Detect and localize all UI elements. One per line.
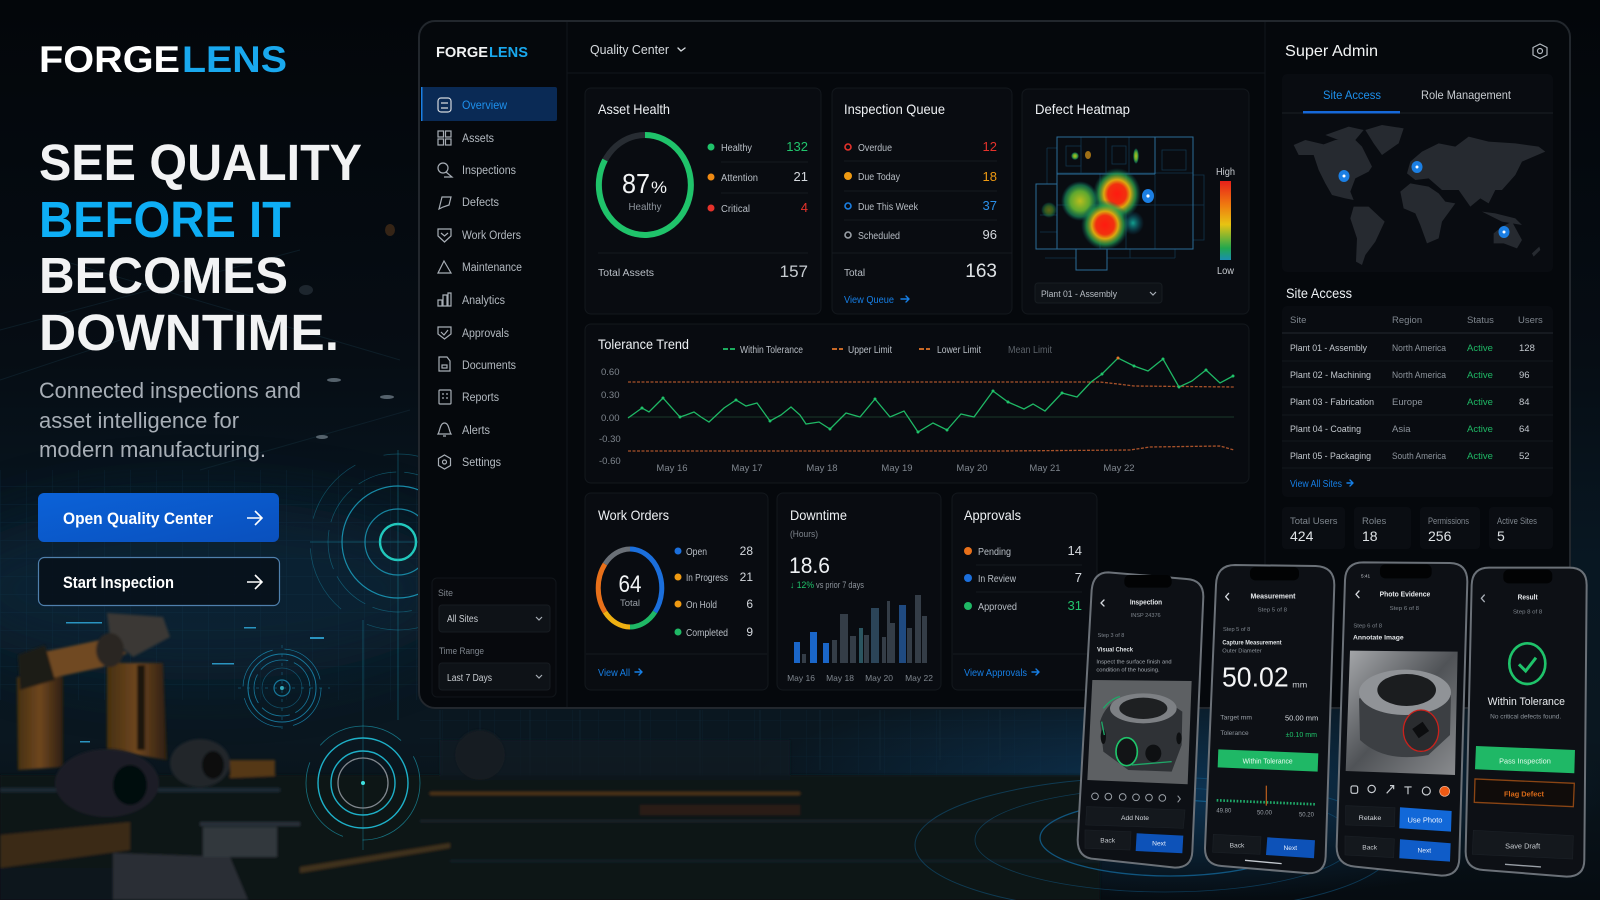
row: Pending: 14	[1068, 543, 1082, 558]
filter panel	[432, 578, 556, 697]
stat: Active Sites: 5	[1497, 528, 1505, 544]
phone 4: Result: Step 8 of 8	[1513, 609, 1542, 615]
floor rings	[915, 777, 1395, 900]
row: In Review: 7	[1075, 570, 1082, 585]
nav: Settings: Settings	[462, 457, 501, 469]
dashboard frame	[419, 21, 1570, 708]
background: robot arm	[17, 613, 170, 770]
stat: Roles: Roles	[1362, 516, 1387, 527]
row: Plant 05: South America	[1392, 451, 1447, 462]
stat: Total Users	[1282, 507, 1345, 549]
donut: 87% healthy: Healthy	[628, 201, 662, 213]
status button: Within Tolerance	[1218, 749, 1318, 772]
donut: 64 total: 64	[618, 571, 642, 598]
x axis: May 21	[1029, 463, 1061, 474]
donut: 64 total	[598, 549, 662, 627]
target and tolerance: Tolerance	[1220, 730, 1249, 737]
x axis: May 18	[806, 463, 838, 474]
legend: asset status: 21	[794, 169, 808, 184]
row: Due Today	[844, 169, 997, 184]
sidebar logo	[436, 45, 528, 61]
row: Approved	[964, 598, 1082, 613]
row: Pending: Pending	[978, 547, 1011, 558]
x axis: May 19	[881, 463, 913, 474]
x axis: May 16	[656, 463, 688, 474]
panel: Downtime: (Hours)	[790, 529, 818, 540]
measurement gauge	[1216, 786, 1316, 819]
button: Flag Defect: Flag Defect	[1504, 790, 1545, 799]
sidebar logo: FORGE	[436, 45, 488, 61]
y axis: 0.30	[601, 390, 620, 401]
link: View Queue: View Queue	[844, 294, 894, 306]
row: Due This Week: Due This Week	[858, 202, 919, 213]
total: 163	[965, 261, 997, 282]
row: Approved: 31	[1068, 598, 1082, 613]
row: Pending	[964, 543, 1082, 558]
panel: Work Orders	[585, 493, 768, 690]
nav: Analytics	[438, 293, 505, 307]
bar labels: May 22	[905, 673, 933, 683]
y axis: -0.60	[599, 456, 621, 467]
phone 3: Photo Evidence: Step 6 of 8	[1353, 624, 1382, 630]
panel: Downtime	[777, 493, 941, 690]
button: Back: Back	[1362, 845, 1378, 852]
HUD target: small ring	[238, 645, 330, 730]
phone 4: Result	[1466, 568, 1587, 877]
filter panel: Time Range	[439, 646, 484, 657]
nav: Work Orders	[438, 229, 521, 242]
nav: Documents: Documents	[462, 360, 516, 372]
button: Add Note	[1086, 807, 1185, 828]
nav: Inspections: Inspections	[462, 165, 516, 177]
row: Overdue: Overdue	[858, 143, 892, 154]
phone 1: Inspection: INSP 24376	[1131, 613, 1161, 619]
y axis	[599, 367, 621, 467]
button: Next	[1136, 833, 1183, 853]
phone 1: Inspection	[1078, 572, 1203, 868]
filter panel: Site	[438, 588, 453, 599]
line chart	[628, 356, 1234, 451]
logo	[39, 39, 287, 80]
stat: Total Users: 424	[1290, 528, 1314, 544]
stat: Permissions	[1420, 507, 1480, 549]
nav: Documents	[439, 357, 516, 372]
status button: Within Tolerance: Within Tolerance	[1243, 758, 1293, 765]
filter panel: All Sites	[447, 614, 478, 625]
row: Plant 04: 64	[1519, 424, 1530, 435]
heat scale: High	[1216, 167, 1235, 178]
stat: Permissions: 256	[1428, 528, 1452, 544]
row: Plant 04	[1290, 424, 1530, 435]
phone 1: Inspection: Inspect the surface finish and	[1096, 659, 1172, 665]
button: Use Photo	[1399, 807, 1452, 832]
donut: 87% healthy: %	[651, 178, 667, 197]
subheading: modern manufacturing.	[39, 437, 266, 462]
row: In Review: In Review	[978, 574, 1017, 585]
button: Retake	[1346, 806, 1395, 827]
row: Plant 02: North America	[1392, 370, 1447, 381]
row: Plant 03: Active	[1467, 397, 1493, 408]
nav: Work Orders: Work Orders	[462, 230, 521, 242]
right panel: Super Admin: Super Admin	[1285, 43, 1378, 60]
target and tolerance: ±0.10 mm	[1286, 732, 1317, 739]
heat blobs	[1041, 148, 1144, 250]
nav: Inspections	[438, 163, 516, 177]
link: View All: View All	[598, 667, 630, 679]
row: Due This Week	[845, 198, 997, 213]
chart legend: Lower Limit	[937, 345, 981, 356]
measurement value: mm	[1292, 680, 1307, 690]
headline: BECOMES	[39, 247, 288, 304]
row: Plant 05: Active	[1467, 451, 1493, 462]
legend: asset status: 132	[786, 139, 808, 154]
phone 3: Photo Evidence	[1337, 562, 1467, 876]
row: Plant 04: Plant 04 - Coating	[1290, 424, 1361, 435]
donut: 87% healthy: 87	[622, 168, 650, 199]
row: Scheduled: 96	[983, 227, 997, 242]
y axis: 0.60	[601, 367, 620, 378]
button: Flag Defect	[1474, 779, 1574, 807]
row: Plant 01: 128	[1519, 343, 1535, 354]
phone 1: Inspection: Step 3 of 8	[1098, 633, 1124, 639]
row: Plant 05: 52	[1519, 451, 1530, 462]
chart legend	[723, 345, 1052, 356]
nav: Maintenance: Maintenance	[462, 262, 522, 274]
panel: Downtime: 18.6	[789, 553, 830, 578]
bar labels: May 20	[865, 673, 893, 683]
nav: Analytics: Analytics	[462, 295, 505, 307]
button: Next	[1266, 837, 1315, 858]
downtime delta	[790, 580, 864, 590]
bar chart	[794, 595, 927, 663]
headline	[39, 134, 362, 361]
chart legend: Upper Limit	[848, 345, 892, 356]
row: Plant 04: Asia	[1392, 424, 1411, 435]
nav active: Overview: Overview	[462, 100, 508, 112]
chart legend: Mean Limit	[1008, 345, 1052, 356]
row: Plant 02	[1290, 370, 1530, 381]
row: Plant 03	[1290, 397, 1530, 408]
stat: Roles: 18	[1362, 528, 1378, 544]
floor plan	[1036, 137, 1204, 270]
row: Plant 03: 84	[1519, 397, 1530, 408]
panel: Asset Health	[585, 88, 821, 314]
x axis	[656, 463, 1135, 474]
stat: Permissions: Permissions	[1428, 516, 1469, 527]
phone 4: Result: Within Tolerance	[1488, 696, 1565, 708]
location pin	[1142, 189, 1154, 203]
phone 2: Measurement	[1205, 565, 1334, 873]
phone 3: Photo Evidence: Photo Evidence	[1380, 589, 1430, 598]
target and tolerance: 50.00 mm	[1285, 716, 1318, 723]
downtime delta: ↓ 12%	[790, 580, 814, 590]
row: Plant 01: Plant 01 - Assembly	[1290, 343, 1367, 354]
panel: Downtime: Downtime	[790, 507, 847, 523]
phone 2: Measurement: Capture Measurement	[1222, 640, 1282, 646]
row: Plant 04: Active	[1467, 424, 1493, 435]
work order legend	[674, 544, 753, 639]
work order legend: On Hold	[686, 600, 717, 611]
plant dropdown: Plant 01 - Assembly	[1041, 289, 1117, 300]
legend: asset status	[598, 139, 808, 253]
button: Retake: Retake	[1359, 815, 1382, 822]
donut: 64 total: Total	[620, 598, 640, 609]
map pins	[1338, 161, 1510, 238]
phone 3: Photo Evidence: Step 6 of 8	[1390, 606, 1419, 612]
row: Plant 05: Plant 05 - Packaging	[1290, 451, 1371, 462]
legend: asset status: Attention	[721, 173, 758, 184]
total assets	[598, 262, 808, 281]
legend: asset status: Healthy	[721, 143, 752, 154]
measurement gauge: 50.20	[1299, 813, 1315, 819]
button: Pass Inspection: Pass Inspection	[1499, 756, 1551, 765]
sidebar logo: LENS	[489, 45, 528, 61]
heat scale: Low	[1217, 266, 1235, 277]
nav: Maintenance	[438, 261, 522, 274]
button: Start Inspection	[38, 558, 280, 606]
phone 2: Measurement: Step 5 of 8	[1258, 608, 1287, 614]
row: Overdue	[845, 139, 997, 154]
phone 2: Measurement: Measurement	[1250, 591, 1296, 600]
icon: pass check	[1509, 643, 1545, 684]
phone 2: Measurement: Outer Diameter	[1222, 648, 1262, 654]
bar labels	[787, 673, 933, 683]
annotated photo: flange part	[1346, 651, 1458, 775]
HUD target: upper ring	[310, 450, 486, 850]
row: In Review	[964, 570, 1082, 585]
row: Scheduled: Scheduled	[858, 231, 900, 242]
measurement gauge: 50.00	[1257, 810, 1273, 816]
button: Next	[1399, 839, 1451, 862]
button: Back	[1213, 834, 1261, 854]
stat: Total Users: Total Users	[1290, 516, 1338, 527]
table: site access	[1282, 306, 1553, 497]
frame dividers	[567, 22, 1265, 707]
panel: Approvals: Approvals	[964, 507, 1021, 523]
donut: 87% healthy	[599, 135, 691, 235]
nav: Assets	[438, 131, 494, 145]
heading: Site Access: Site Access	[1286, 285, 1352, 301]
table: site access: Region	[1392, 315, 1422, 326]
world map	[1294, 125, 1545, 265]
nav: Alerts	[438, 423, 490, 437]
row: Approved: Approved	[978, 602, 1017, 613]
row: Plant 02: Active	[1467, 370, 1493, 381]
button: Open Quality Center	[38, 493, 279, 542]
phone 3: Photo Evidence: Annotate Image	[1353, 634, 1404, 641]
icon: settings gear	[1533, 44, 1547, 58]
top bar: Quality Center: Quality Center	[590, 43, 669, 57]
link: View Approvals: View Approvals	[964, 667, 1027, 679]
row: Plant 03: Europe	[1392, 397, 1423, 408]
work order legend: In Progress	[686, 573, 728, 584]
nav: Defects	[439, 197, 499, 209]
annotation tools	[1092, 793, 1180, 802]
row: Plant 03: Plant 03 - Fabrication	[1290, 397, 1374, 408]
nav: Approvals: Approvals	[462, 328, 509, 340]
phone 1: Inspection: condition of the housing.	[1096, 667, 1160, 673]
button: Back: Back	[1100, 838, 1116, 845]
measurement value: 50.02	[1222, 662, 1289, 693]
HUD target: lower ring	[306, 726, 420, 840]
nav active: Overview	[421, 87, 557, 121]
work order legend: 28	[740, 544, 753, 558]
phone 2: Measurement: Step 5 of 8	[1223, 627, 1250, 633]
logo: LENS	[182, 39, 287, 80]
x axis: May 20	[956, 463, 988, 474]
row: Due Today: Due Today	[858, 172, 900, 183]
right panel: Super Admin	[1282, 43, 1553, 549]
row: Due Today: 18	[983, 169, 997, 184]
target and tolerance	[1220, 714, 1318, 739]
headline: DOWNTIME.	[39, 304, 339, 361]
work order legend: 9	[746, 625, 753, 639]
row: Overdue: 12	[983, 139, 997, 154]
bar labels: May 16	[787, 673, 815, 683]
panel: Defect Heatmap: Defect Heatmap	[1035, 101, 1130, 117]
button: Start Inspection: Start Inspection	[63, 573, 174, 592]
phone 4: Result: No critical defects found.	[1490, 714, 1562, 720]
row: Plant 05	[1290, 451, 1530, 462]
annotation tools	[1351, 785, 1450, 796]
link: View All Sites: View All Sites	[1290, 479, 1342, 490]
sidebar	[421, 45, 557, 697]
map card with tabs: Role Management	[1421, 88, 1512, 102]
heat scale	[1216, 167, 1235, 277]
row: Plant 01: North America	[1392, 343, 1447, 354]
legend: asset status: Critical	[721, 204, 750, 215]
nav: Reports: Reports	[462, 392, 499, 404]
button: Save Draft	[1472, 830, 1573, 859]
button: Pass Inspection	[1475, 746, 1575, 773]
nav: Assets: Assets	[462, 133, 494, 145]
legend: asset status: 4	[801, 200, 808, 215]
target and tolerance: Target mm	[1220, 714, 1252, 721]
panel: Approvals	[952, 493, 1097, 690]
button: Open Quality Center: Open Quality Center	[63, 509, 213, 528]
bar labels: May 18	[826, 673, 854, 683]
button: Next: Next	[1283, 845, 1297, 852]
row: Plant 01	[1290, 343, 1535, 354]
chart legend: Within Tolerance	[740, 345, 803, 356]
button: Next: Next	[1417, 848, 1431, 855]
row: Plant 02: 96	[1519, 370, 1530, 381]
headline: SEE QUALITY	[39, 134, 362, 191]
button: Save Draft: Save Draft	[1505, 843, 1540, 850]
map card with tabs	[1282, 74, 1553, 272]
phone 1: Inspection: Inspection	[1130, 597, 1163, 606]
panel: Tolerance Trend: Tolerance Trend	[598, 336, 689, 352]
panel: Tolerance Trend	[585, 324, 1249, 483]
headline: BEFORE IT	[39, 191, 291, 248]
button: Back: Back	[1230, 842, 1245, 849]
downtime delta: vs prior 7 days	[816, 580, 864, 590]
row: Plant 01: Active	[1467, 343, 1493, 354]
filter panel: Last 7 Days	[447, 673, 492, 684]
x axis: May 22	[1103, 463, 1135, 474]
factory lights	[66, 224, 395, 814]
button: Next: Next	[1152, 841, 1166, 848]
button: Back	[1085, 830, 1131, 850]
subheading: asset intelligence for	[39, 408, 239, 433]
work order legend: Completed	[686, 628, 728, 639]
button: Add Note: Add Note	[1121, 815, 1149, 822]
panel: Inspection Queue: Inspection Queue	[844, 101, 945, 117]
row: Plant 02: Plant 02 - Machining	[1290, 370, 1371, 381]
nav: Alerts: Alerts	[462, 425, 490, 437]
stat: Active Sites: Active Sites	[1497, 516, 1537, 527]
total: Total	[844, 268, 865, 279]
subheading: Connected inspections and	[39, 378, 301, 403]
background: machined parts	[0, 730, 1100, 900]
panel: Defect Heatmap	[1022, 89, 1249, 314]
table: site access: Site	[1290, 315, 1306, 326]
stat: Roles	[1354, 507, 1411, 549]
stat: Active Sites	[1489, 507, 1553, 549]
total assets: Total Assets	[598, 268, 654, 279]
x axis: May 17	[731, 463, 763, 474]
inspection photo: flange part	[1087, 680, 1192, 784]
work order legend: Open	[686, 547, 707, 558]
nav: Reports	[439, 390, 499, 404]
button: Back	[1345, 836, 1394, 858]
work order legend: 21	[740, 570, 753, 584]
y axis: -0.30	[599, 434, 621, 445]
phone 1: Inspection: Visual Check	[1097, 646, 1133, 653]
phone 4: Result: Result	[1518, 593, 1538, 602]
table: site access: Users	[1518, 315, 1543, 326]
total	[844, 261, 997, 282]
measurement gauge: 49.80	[1216, 809, 1232, 815]
nav: Settings	[438, 455, 501, 469]
phone 3: Photo Evidence: 5:41	[1361, 574, 1370, 579]
map card with tabs: Site Access	[1323, 88, 1381, 102]
panel: Inspection Queue	[832, 88, 1012, 314]
y axis: 0.00	[601, 413, 620, 424]
button: Use Photo: Use Photo	[1407, 817, 1443, 824]
total assets: 157	[780, 262, 808, 281]
nav: Defects: Defects	[462, 197, 499, 209]
nav: Approvals	[438, 327, 509, 340]
panel: Work Orders: Work Orders	[598, 507, 669, 523]
work order legend: 6	[746, 597, 753, 611]
row: Scheduled	[845, 227, 997, 242]
panel: Asset Health: Asset Health	[598, 101, 670, 117]
row: Due This Week: 37	[983, 198, 997, 213]
subheading	[39, 378, 301, 462]
plant dropdown	[1035, 283, 1162, 303]
table: site access: Status	[1467, 315, 1494, 326]
logo: FORGE	[39, 39, 180, 80]
